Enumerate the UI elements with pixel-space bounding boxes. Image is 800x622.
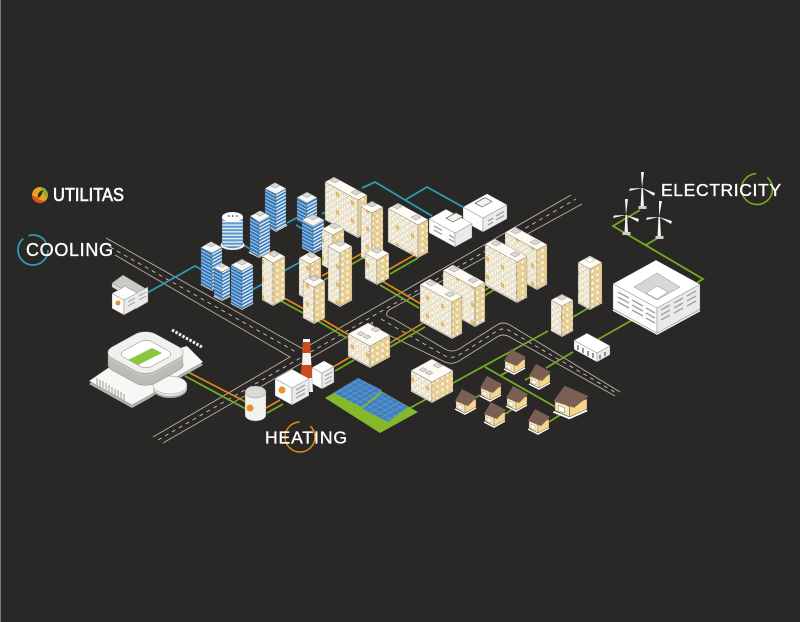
office W1 (463, 194, 507, 232)
plant building: front (275, 369, 309, 405)
blue cylinder tower (220, 212, 244, 250)
logistics shed (574, 333, 610, 362)
brand name: UTILITAS (53, 185, 124, 205)
wind turbines (613, 172, 672, 239)
apartment block C10 (348, 323, 390, 367)
apartment block C15 (505, 227, 547, 289)
apartment block C12 (420, 279, 462, 338)
heating label (265, 422, 347, 452)
tower C7 (299, 252, 321, 300)
cooling station (112, 275, 148, 315)
electricity label (661, 174, 781, 204)
electricity pipes (410, 210, 703, 422)
roads (106, 195, 620, 443)
blue tower 4 (297, 192, 317, 226)
blue tower 2 (249, 211, 270, 257)
blue tower 5 (302, 214, 324, 253)
blue tower 8 (231, 259, 253, 309)
electricity label: ELECTRICITY (661, 180, 781, 200)
blue tower 7 (214, 263, 230, 300)
blue tower 6 (201, 242, 222, 290)
office W2 (429, 209, 472, 247)
tower C8 (303, 275, 325, 323)
data centre (613, 260, 700, 334)
solar field (325, 378, 418, 433)
tower C4 (328, 240, 352, 306)
apartment block C14 (485, 239, 527, 302)
tower C6 (262, 250, 285, 305)
cooling label (18, 235, 113, 265)
apartment block C9 (388, 203, 428, 257)
plant building: rear (312, 361, 334, 389)
houses (455, 349, 589, 434)
heating pipes (185, 251, 502, 413)
tank (245, 386, 266, 421)
stadium (89, 328, 203, 408)
chimney (300, 339, 313, 392)
blue tower 3 (264, 182, 287, 231)
logo mark (32, 187, 48, 203)
tower C5 (365, 247, 389, 284)
frame edge (0, 0, 1, 622)
apartment block C13 (443, 265, 485, 326)
apartment block C1 (325, 177, 367, 237)
tower C3 (322, 223, 344, 271)
tower C2 (361, 201, 383, 262)
apartment block C11 (411, 359, 453, 402)
heating label: HEATING (265, 428, 347, 448)
tower C17 (578, 256, 602, 309)
cooling label: COOLING (26, 240, 113, 260)
cooling pipes (147, 182, 463, 293)
tower C16 (551, 294, 573, 336)
